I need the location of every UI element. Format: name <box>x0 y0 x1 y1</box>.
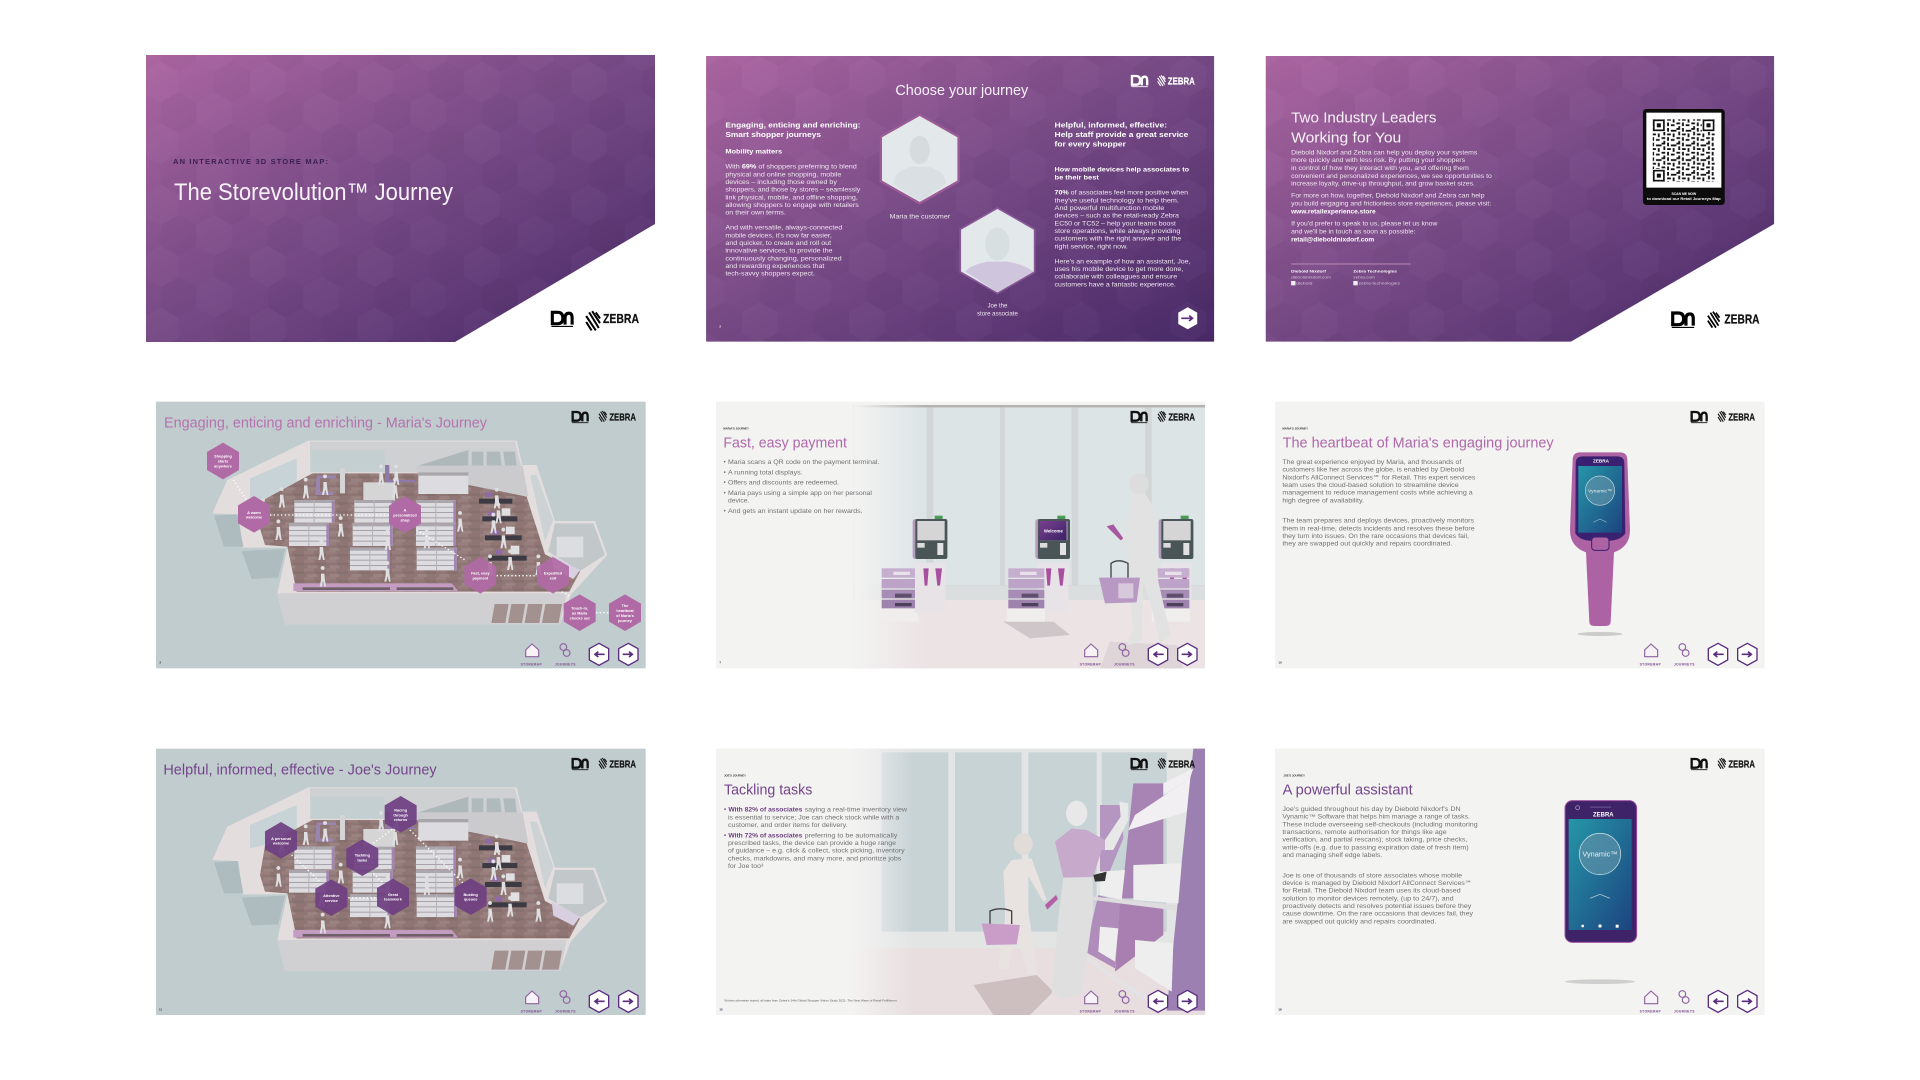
logos: ZEBRA <box>609 412 636 423</box>
text block: smart shopper journeys: devices – including those owned by <box>725 180 837 186</box>
text block: contact copy: www.retailexperience.store <box>1290 209 1376 215</box>
logos <box>572 411 636 423</box>
heading: Fast, easy payment <box>723 435 847 451</box>
body text: high degree of availability. <box>1282 498 1364 504</box>
bullet list: for Joe too³ <box>728 864 763 870</box>
body text: proactively detects and resolves potential issues before they <box>1282 904 1471 910</box>
body text: team uses the cloud-based solution to streamline device <box>1282 483 1459 489</box>
QR code card: SCAN ME NOW <box>1672 192 1697 196</box>
hotspot: the heartbeat of Maria's journey <box>609 594 641 631</box>
hotspot: racing through returns <box>385 796 417 833</box>
hotspot: attentive service: Attentive <box>323 894 340 898</box>
bullet list: saying a real-time inventory view <box>805 808 908 814</box>
panel: Maria's journey store map <box>156 402 646 668</box>
text block: smart shopper journeys: Engaging, enticing and enriching: <box>725 120 861 129</box>
panel: a powerful assistant <box>1275 749 1765 1015</box>
body text: transactions, remote authorisation for things like age <box>1282 830 1447 836</box>
hotspot: shopping starts anywhere: starts <box>218 460 228 464</box>
heading: The heartbeat of Maria's engaging journey <box>1283 435 1554 451</box>
QR code card: to download our Retail Journeys Map <box>1647 197 1721 201</box>
body text: The great experience enjoyed by Maria, and thousands of <box>1282 460 1462 466</box>
text block: smart shopper journeys: and rewarding experiences that <box>725 264 825 270</box>
heading: A powerful assistant <box>1283 782 1413 798</box>
hotspot: the heartbeat of Maria's journey: heartbeat <box>616 609 634 613</box>
company links: Zebra Technologies <box>1353 269 1398 274</box>
navigation: STOREMAP <box>521 1010 543 1014</box>
small label: MARIA'S JOURNEY <box>1282 428 1309 431</box>
hotspot: busting queues: Busting <box>464 893 478 897</box>
cover title: The Storevolution™ Journey <box>174 179 453 206</box>
hotspot: great teamwork: Great <box>388 893 399 897</box>
company links: dieboldnixdorf.com <box>1291 275 1332 280</box>
bullet list: is essential to service; Joe can check stock while with a <box>728 815 900 821</box>
body text: them in real-time, detects incidents and resolves these before <box>1282 526 1475 532</box>
text block: contact copy: you build engaging and frictionless store experiences, please visit: <box>1291 202 1492 208</box>
navigation <box>521 643 638 667</box>
hotspot: great teamwork: teamwork <box>384 898 403 902</box>
text block: help staff provide great service: customers with the right answer and the <box>1055 237 1182 243</box>
text block: smart shopper journeys: physical and online shopping, mobile <box>725 172 842 178</box>
bullet list: device. <box>728 499 750 505</box>
navigation <box>521 990 638 1014</box>
panel: two industry leaders slide <box>1266 56 1774 342</box>
navigation <box>1640 990 1757 1014</box>
navigation: JOURNEYS <box>1674 663 1695 667</box>
portrait: Maria the customer <box>881 115 959 221</box>
hotspot: busting queues: queues <box>464 898 477 902</box>
portrait: Joe the store associate <box>960 208 1035 317</box>
shelving unit <box>1085 749 1205 1011</box>
text block: smart shopper journeys <box>725 120 861 278</box>
text block: smart shopper journeys: on their own terms. <box>725 211 786 217</box>
page number: 10 <box>1278 660 1282 664</box>
navigation: STOREMAP <box>1640 663 1662 667</box>
body text: device is managed by Diebold Nixdorf AllConnect Services℠ <box>1282 880 1472 887</box>
3D store map <box>212 441 607 624</box>
hotspot: shopping starts anywhere: Shopping <box>214 455 232 459</box>
heading <box>1291 111 1436 146</box>
text block: smart shopper journeys: continuously changing, personalized <box>725 256 842 262</box>
text block: help staff provide great service: EC50 or TC52 – help your teams boost <box>1055 221 1176 227</box>
body text: Joe is one of thousands of store associates whose mobile <box>1282 873 1463 879</box>
QR code card <box>1643 109 1725 205</box>
body text: write-offs (e.g. due to passing expiration date of fresh item) <box>1281 845 1469 851</box>
body text: they turn into issues. On the rare occasions that devices fail, <box>1282 534 1469 540</box>
mobile phone illustration: ZEBRA <box>1593 813 1614 819</box>
panel: fast, easy payment scene <box>716 402 1205 668</box>
body text: cause downtime. On the rare occasions that devices fail, they <box>1282 912 1473 918</box>
text block: smart shopper journeys: tech-savvy shoppers expect. <box>725 272 815 278</box>
logos <box>1131 75 1195 87</box>
text block: smart shopper journeys: shoppers, and those by stores – seamlessly <box>725 188 860 194</box>
hotspot: expedited exit: exit <box>550 577 557 581</box>
page number: 11 <box>159 1007 162 1011</box>
text block: help staff provide great service: customers have a fantastic experience. <box>1055 282 1176 288</box>
text block: help staff provide great service: they've useful technology to help them. <box>1055 198 1179 204</box>
bullet list: Maria scans a QR code on the payment terminal. <box>728 460 880 466</box>
self-checkout kiosks and baskets <box>880 516 1193 622</box>
hotspot: a warm welcome: A warm <box>247 511 261 515</box>
small label: JOE'S JOURNEY <box>1283 776 1306 778</box>
hotspot: busting queues <box>455 878 487 915</box>
navigation: STOREMAP <box>1080 663 1102 667</box>
portrait: Maria the customer: Maria the customer <box>890 215 950 221</box>
hotspot: fast, easy payment: Fast, easy <box>471 572 490 576</box>
heading: Tackling tasks <box>724 782 812 798</box>
company links: zebra.com <box>1353 275 1376 280</box>
navigation: STOREMAP <box>521 663 543 667</box>
bullet list <box>724 460 880 515</box>
panel: heartbeat of Maria's journey <box>1275 402 1765 668</box>
hotspot: a warm welcome <box>238 496 270 533</box>
body text <box>1282 460 1475 548</box>
bullet list: • <box>724 491 726 497</box>
body text: solution to monitor devices remotely, (up to 24/7), and <box>1282 896 1454 902</box>
hotspot: racing through returns: returns <box>394 818 407 822</box>
navigation: JOURNEYS <box>555 1010 576 1014</box>
body text: and managing shelf edge labels. <box>1282 853 1383 859</box>
bullet list: With 72% of associates <box>728 833 803 839</box>
small label: MARIA'S JOURNEY <box>723 428 750 431</box>
hotspot: attentive service: service <box>325 899 338 903</box>
text block: help staff provide great service: collaborate with colleagues and ensure <box>1055 275 1178 281</box>
logos <box>1691 411 1755 423</box>
bullet list: prescribed tasks, the device can provide a huge range <box>728 841 897 847</box>
text block: smart shopper journeys: innovative services, to provide the <box>725 249 833 255</box>
arrow: next <box>1178 307 1197 329</box>
company links: zebra-technologies <box>1359 281 1400 286</box>
mobile phone illustration: Vynamic™ <box>1582 850 1618 859</box>
hotspot: the heartbeat of Maria's journey: journey <box>617 619 633 623</box>
hotspot: fast, easy payment <box>464 557 496 594</box>
mobile phone illustration <box>1565 801 1637 984</box>
hotspot: the heartbeat of Maria's journey: The <box>622 604 628 608</box>
bullet list: Offers and discounts are redeemed. <box>728 481 839 487</box>
panel: tackling tasks scene <box>716 749 1205 1015</box>
text block: smart shopper journeys: Mobility matters <box>725 149 783 155</box>
bullet list: • <box>724 460 726 466</box>
hotspot: a personal welcome: welcome <box>272 842 289 846</box>
text block: smart shopper journeys: and quicker, to create and roll out <box>725 241 832 247</box>
text block: smart shopper journeys: And with versatile, always-connected <box>725 226 842 232</box>
text block: contact copy: convenient and personalized experiences, we see opportunities to <box>1291 174 1493 180</box>
fade overlay <box>850 749 913 1015</box>
company links: Diebold Nixdorf <box>1291 269 1327 274</box>
text block: contact copy: and we'll be in touch as soon as possible: <box>1291 230 1416 236</box>
text block: smart shopper journeys: allowing shoppers to engage with retailers <box>725 203 859 209</box>
text block: help staff provide great service: Help staff provide a great service <box>1055 130 1188 139</box>
window backdrop and floor <box>853 405 1205 668</box>
hotspot: a personalized shop: personalized <box>393 513 417 517</box>
panel: Joe's journey store map <box>156 749 646 1015</box>
logos: ZEBRA <box>1168 759 1195 770</box>
bullet list: of guidance – e.g. click & collect, stock picking, inventory <box>728 849 905 855</box>
title: Helpful, informed, effective - Joe's Journey <box>163 762 437 778</box>
handheld device illustration: Vynamic™ <box>1588 488 1612 494</box>
text block: contact copy: Diebold Nixdorf and Zebra can help you deploy your systems <box>1291 150 1477 156</box>
bullet list: • <box>724 833 726 839</box>
text block: help staff provide great service: devices – such as the retail-ready Zebra <box>1055 214 1180 220</box>
body text: These include overseeing self-checkouts (including monitoring <box>1282 822 1478 828</box>
logos <box>1691 758 1755 770</box>
text block: smart shopper journeys: With 69% of shoppers preferring to blend <box>725 165 857 171</box>
text block: help staff provide great service: How mobile devices help associates to <box>1055 167 1189 173</box>
journey path dotted <box>292 828 463 898</box>
shopper figure <box>982 833 1058 975</box>
text block: contact copy: increase loyalty, drive-up throughput, and grow basket sizes. <box>1291 182 1475 188</box>
company links <box>1291 269 1400 286</box>
text block: help staff provide great service: Helpful, informed, effective: <box>1055 120 1167 129</box>
body text: for Retail. The Diebold Nixdorf team uses its cloud-based <box>1282 889 1461 895</box>
logos: Diebold Nixdorf and Zebra <box>551 311 639 330</box>
text block: contact copy: retail@dieboldnixdorf.com <box>1291 237 1374 243</box>
text block: smart shopper journeys: mobile devices, it's now far easier, <box>725 233 832 239</box>
hotspot: touch-in as Maria checks out: Touch-in, <box>571 606 588 610</box>
body text: verification, and partial rescans); stock taking, price checks, <box>1282 838 1468 844</box>
hotspot: the heartbeat of Maria's journey: of Maria's <box>616 614 634 618</box>
title: Engaging, enticing and enriching - Maria's Journey <box>164 415 488 431</box>
portrait: Joe the store associate: Joe the <box>987 304 1008 310</box>
journey path dotted <box>233 480 610 613</box>
body text: management to reduce management costs while achieving a <box>1282 491 1473 497</box>
logos <box>1131 758 1195 770</box>
navigation: JOURNEYS <box>1114 663 1135 667</box>
text block: help staff provide great service: be their best <box>1055 176 1099 182</box>
hotspot: shopping starts anywhere: anywhere <box>214 465 232 469</box>
bullet list: checks, markdowns, and many more, and prioritize jobs <box>728 856 901 862</box>
hotspot: a personalized shop <box>389 496 421 533</box>
heading: Two Industry Leaders <box>1291 111 1436 127</box>
text block: help staff provide great service: Here's an example of how an assistant, Joe, <box>1055 259 1191 265</box>
window backdrop and floor <box>850 749 1205 1015</box>
logos: Diebold Nixdorf and Zebra: ZEBRA <box>603 311 639 326</box>
hotspot: expedited exit <box>537 557 569 594</box>
shopper figure Maria <box>1099 473 1171 646</box>
text block: help staff provide great service: store operations, while always providing <box>1055 229 1180 235</box>
logos: ZEBRA <box>1724 311 1760 326</box>
navigation: JOURNEYS <box>555 663 576 667</box>
hotspot: tackling tasks <box>346 839 378 876</box>
associate figure Joe <box>1052 801 1128 1000</box>
logos <box>572 758 636 770</box>
portrait: Joe the store associate: store associate <box>977 311 1019 317</box>
hotspot: tackling tasks: tasks <box>357 859 367 863</box>
text block: smart shopper journeys: link physical, mobile, and offline shopping, <box>725 195 858 201</box>
bullet list: • <box>724 509 726 515</box>
navigation: JOURNEYS <box>1114 1010 1135 1014</box>
self-checkout kiosks and baskets: Welcome <box>1044 529 1063 534</box>
3D store map <box>212 787 607 971</box>
heading: Working for You <box>1291 130 1401 146</box>
bullet list: And gets an instant update on her rewards. <box>728 509 863 515</box>
page number: 15 <box>719 1007 723 1011</box>
bullet list: preferring to be automatically <box>805 833 897 839</box>
eyebrow text: AN INTERACTIVE 3D STORE MAP: <box>173 157 328 166</box>
text block: contact copy: in control of how they interact with you, and offering them <box>1291 166 1469 172</box>
navigation: STOREMAP <box>1640 1010 1662 1014</box>
text block: contact copy <box>1290 150 1493 243</box>
body text: are swapped out quickly and repairs coordinated. <box>1282 919 1437 925</box>
handheld device illustration <box>1570 452 1630 636</box>
logos: ZEBRA <box>1728 412 1755 423</box>
navigation <box>1080 990 1197 1014</box>
hotspot: racing through returns: Racing <box>394 808 408 812</box>
page number: 18 <box>1278 1007 1282 1011</box>
bullet list: • <box>724 481 726 487</box>
navigation: STOREMAP <box>1080 1010 1102 1014</box>
text block: help staff provide great service: uses his mobile device to get more done, <box>1055 267 1184 273</box>
hotspot: fast, easy payment: payment <box>472 577 489 581</box>
logos: ZEBRA <box>1168 412 1195 423</box>
panel: choose your journey slide <box>706 56 1214 342</box>
text block: contact copy: If you'd prefer to speak to us, please let us know <box>1291 222 1438 228</box>
bullet list: customer, and order items for delivery. <box>728 823 848 829</box>
bullet list: • <box>724 808 726 814</box>
bullet list <box>724 808 908 870</box>
bullet list: • <box>724 470 726 476</box>
handheld device illustration: ZEBRA <box>1593 459 1610 464</box>
hotspot: touch-in as Maria checks out: as Maria <box>572 611 588 615</box>
hotspot: a warm welcome: welcome <box>245 516 262 520</box>
body text: customers like her across the globe, is enabled by Diebold <box>1282 468 1464 474</box>
text block: help staff provide great service <box>1055 120 1191 288</box>
bullet list: Maria pays using a simple app on her personal <box>728 491 872 497</box>
hotspot: touch-in as Maria checks out <box>564 594 596 631</box>
navigation <box>1080 643 1197 667</box>
text block: contact copy: For more on how, together, Diebold Nixdorf and Zebra can help <box>1291 194 1485 200</box>
panel: cover slide <box>146 55 655 342</box>
hotspot: a personalized shop: A <box>404 508 407 512</box>
page number: 3 <box>159 660 161 664</box>
hotspot: tackling tasks: Tackling <box>355 854 371 858</box>
page number: 7 <box>719 660 721 664</box>
hotspot: a personal welcome <box>265 822 297 859</box>
hotspot: touch-in as Maria checks out: checks out <box>570 616 590 620</box>
logos <box>1672 311 1760 328</box>
logos: ZEBRA <box>1168 76 1195 87</box>
hotspot: a personalized shop: shop <box>400 518 410 522</box>
body text: Joe's guided throughout his day by Diebold Nixdorf's DN <box>1282 807 1461 813</box>
hotspot: expedited exit: Expedited <box>544 572 563 576</box>
text block: smart shopper journeys: Smart shopper journeys <box>725 130 821 139</box>
text block: help staff provide great service: for every shopper <box>1055 140 1126 149</box>
company links: diebold <box>1296 281 1312 286</box>
body text: Vynamic™ Software that helps him manage a range of tasks. <box>1282 814 1470 821</box>
small label: JOE'S JOURNEY <box>724 776 747 778</box>
footnote: ³Unless otherwise stated, all stats from Zebra's 14th Global Shopper Vision Study 2021: The Next Wave of Retail Fulfillment <box>724 999 897 1002</box>
fade overlay <box>853 402 923 668</box>
logos: ZEBRA <box>609 759 636 770</box>
hotspot: attentive service <box>315 879 347 916</box>
hotspot: a personal welcome: A personal <box>271 837 291 841</box>
bullet list: A running total displays. <box>728 470 803 476</box>
body text: they are swapped out quickly and repairs coordinated. <box>1282 542 1453 548</box>
body text: Nixdorf's AllConnect Services℠ for Retail. This expert services <box>1282 474 1475 481</box>
navigation: JOURNEYS <box>1674 1010 1695 1014</box>
text block: help staff provide great service: 70% of associates feel more positive when <box>1055 191 1188 197</box>
logos: ZEBRA <box>1728 759 1755 770</box>
page number: 2 <box>719 324 721 328</box>
logos <box>1131 411 1195 423</box>
slide title: Choose your journey <box>895 83 1029 99</box>
navigation <box>1640 643 1757 667</box>
body text <box>1281 807 1478 925</box>
hotspot: great teamwork <box>377 879 409 915</box>
text block: contact copy: more quickly and with less risk. By putting your shoppers <box>1291 158 1465 164</box>
bullet list: With 82% of associates <box>728 808 803 814</box>
text block: help staff provide great service: And powerful multifunction mobile <box>1055 206 1165 212</box>
body text: The team prepares and deploys devices, proactively monitors <box>1282 519 1474 525</box>
hotspot: racing through returns: through <box>393 813 409 817</box>
text block: help staff provide great service: right service, right now. <box>1055 244 1128 250</box>
hotspot: shopping starts anywhere <box>207 443 239 479</box>
